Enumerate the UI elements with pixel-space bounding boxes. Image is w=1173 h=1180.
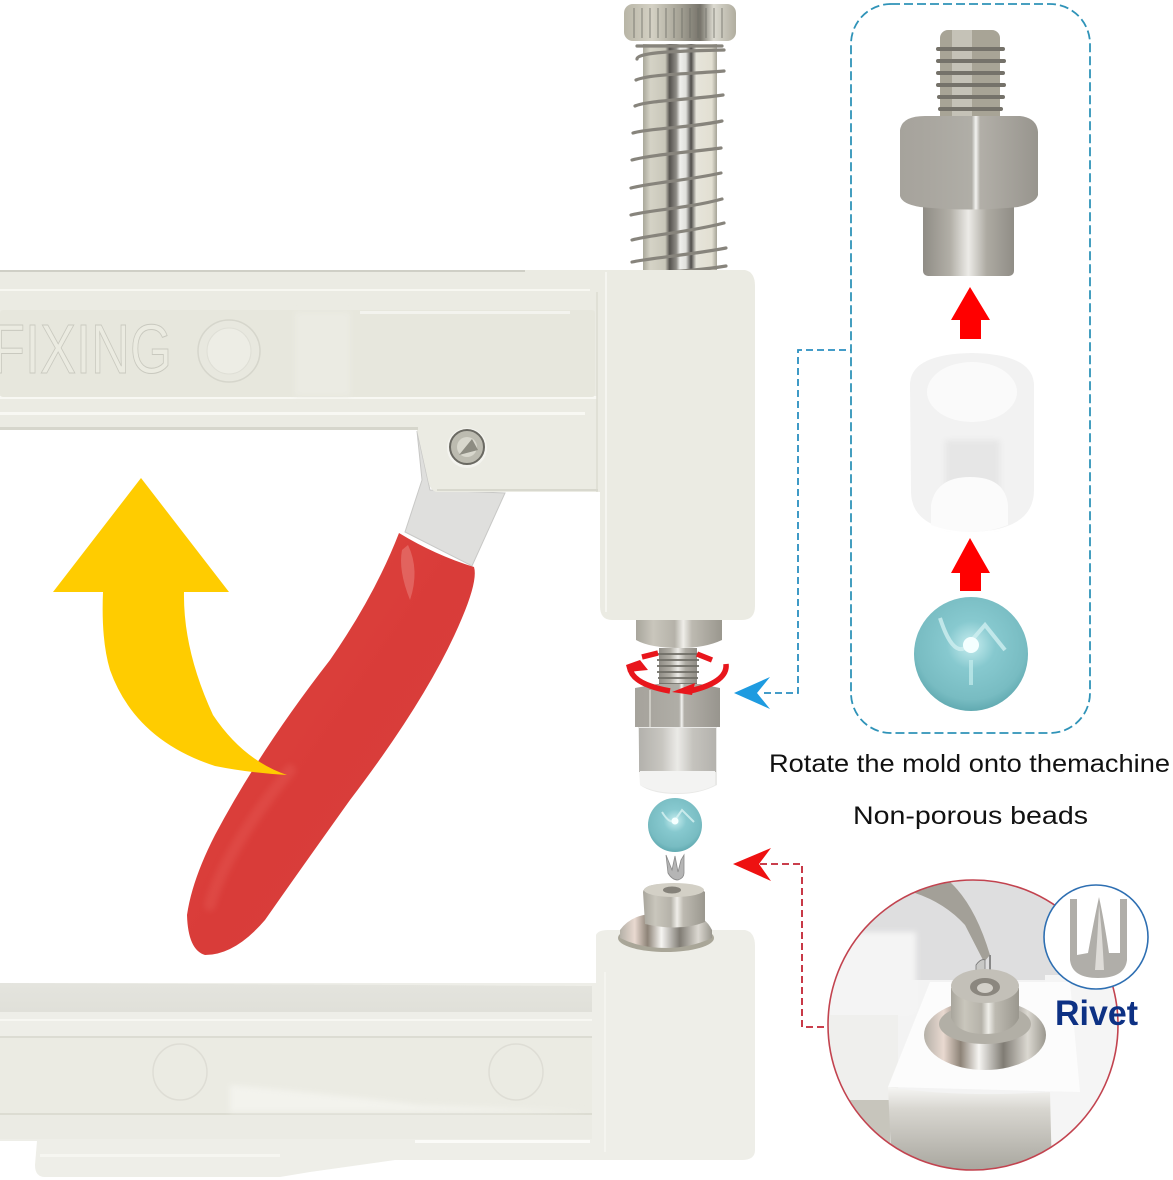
red arrow up [951,538,990,591]
threaded stud [657,648,699,690]
red arrow [733,848,771,881]
clear sleeve part [910,353,1034,532]
red arrow up [951,287,990,339]
blue arrow [734,677,770,709]
red handle [187,533,475,955]
upper machine frame [0,270,755,620]
spring screw [624,4,736,274]
threaded stud part [900,30,1038,276]
panel: mold parts [851,4,1090,733]
hex mold on machine [635,684,720,728]
yellow curved arrow [53,478,287,775]
blue dashed connector [764,350,851,693]
red dashed connector [760,864,828,1027]
rotation arrows [626,653,726,695]
rivet on machine [666,855,684,880]
lower die and flange [618,883,714,952]
hinge screw [447,428,487,468]
caption: rotate mold: Rotate the mold onto themachine [769,750,1170,778]
rivet detail circle [1044,885,1148,989]
inset: rivet placement [828,880,1148,1175]
flange [924,1000,1046,1070]
upper die collar [636,620,722,648]
rivet label: Rivet [1055,994,1138,1033]
caption: beads: Non-porous beads [853,802,1088,830]
pearl bead part [914,597,1028,711]
lever metal arm [405,431,505,566]
embossed round mark [198,320,260,382]
pearl bead on machine [648,798,702,852]
lower machine frame [0,930,755,1177]
clear sleeve on machine [638,727,717,794]
